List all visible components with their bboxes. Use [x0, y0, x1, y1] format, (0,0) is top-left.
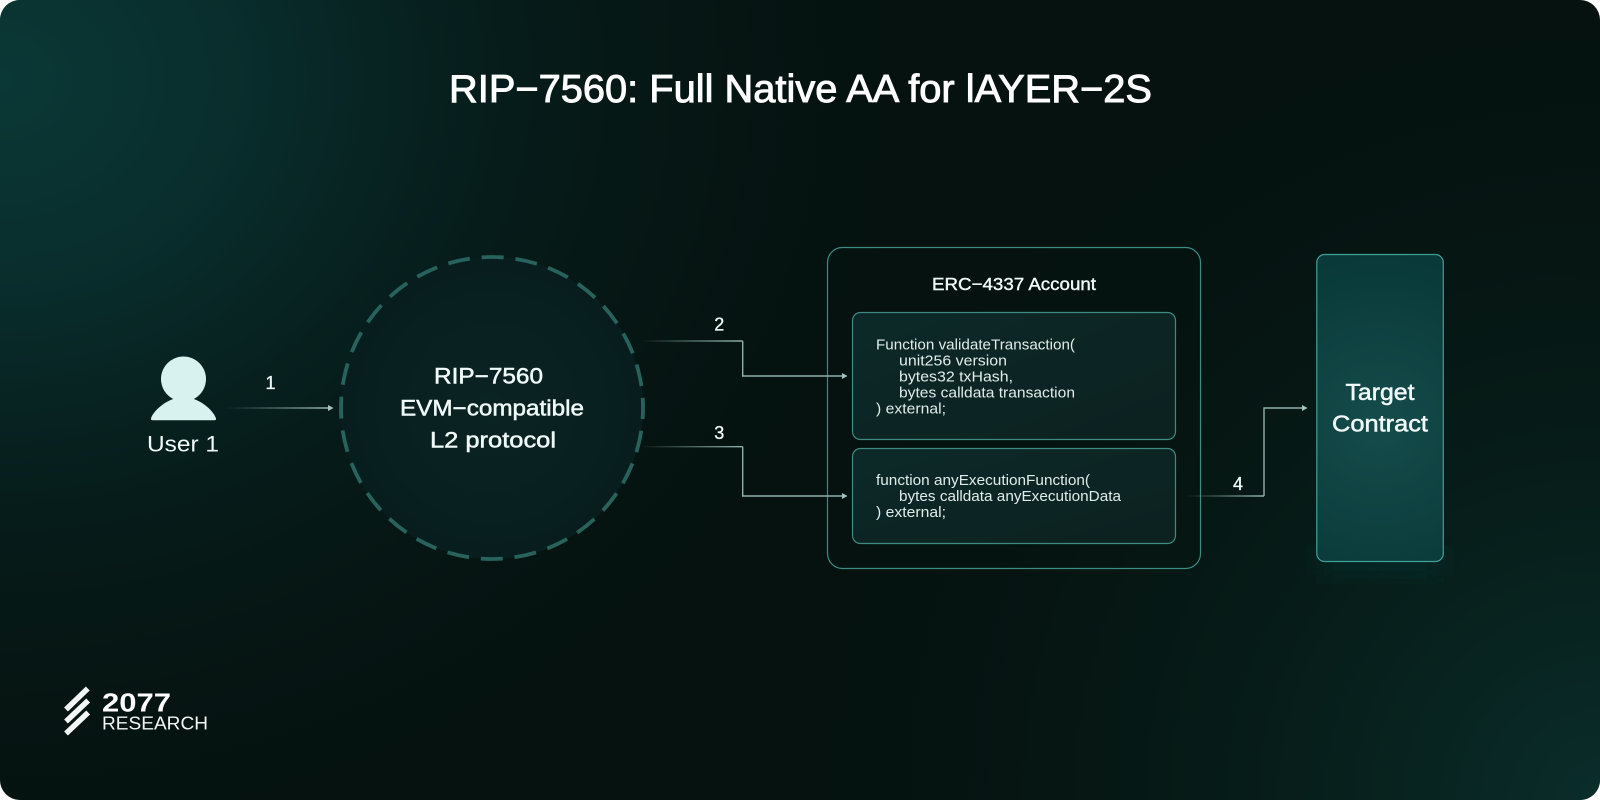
protocol label line 1: RIP−7560 — [434, 364, 543, 388]
code box: anyExecutionFunction: function anyExecutionFunction( — [876, 472, 1090, 489]
arrow 3: protocol to execution — [640, 447, 848, 499]
code box: validateTransaction: bytes calldata transaction — [899, 384, 1075, 401]
target label line 1: Target — [1346, 379, 1415, 405]
account heading: ERC−4337 Account — [932, 274, 1096, 294]
code box: validateTransaction — [852, 312, 1176, 440]
step number 1: 1 — [265, 373, 276, 393]
code box: validateTransaction: ) external; — [876, 400, 946, 417]
panel: ERC-4337 account — [828, 248, 1200, 568]
code box: validateTransaction: unit256 version — [899, 352, 1007, 369]
title: RIP−7560: Full Native AA for lAYER−2S — [449, 68, 1152, 111]
code box: validateTransaction: Function validateTransaction( — [876, 336, 1075, 353]
panel: RIP-7560 protocol circle — [341, 257, 643, 559]
step number 3: 3 — [714, 423, 724, 443]
arrow 2: protocol to validate — [640, 341, 848, 379]
logo: 2077 Research — [66, 688, 208, 734]
panel: target contract — [1317, 254, 1443, 575]
target label line 2: Contract — [1332, 411, 1429, 437]
logo mark — [66, 688, 88, 734]
protocol label line 2: EVM−compatible — [400, 396, 584, 420]
step number 4: 4 — [1233, 474, 1243, 494]
user label: User 1 — [147, 432, 219, 456]
arrow 1: user to protocol — [226, 405, 334, 411]
code box: validateTransaction: bytes32 txHash, — [899, 368, 1013, 385]
arrow 4: execution to target — [1186, 405, 1308, 496]
logo wordmark research: RESEARCH — [102, 713, 208, 733]
code box: anyExecutionFunction: bytes calldata anyExecutionData — [899, 488, 1122, 505]
protocol label line 3: L2 protocol — [430, 428, 556, 452]
logo wordmark 2077: 2077 — [102, 690, 171, 718]
code box: anyExecutionFunction — [852, 448, 1176, 544]
icon: user — [151, 356, 216, 420]
code box: anyExecutionFunction: ) external; — [876, 504, 946, 521]
step number 2: 2 — [714, 314, 724, 334]
